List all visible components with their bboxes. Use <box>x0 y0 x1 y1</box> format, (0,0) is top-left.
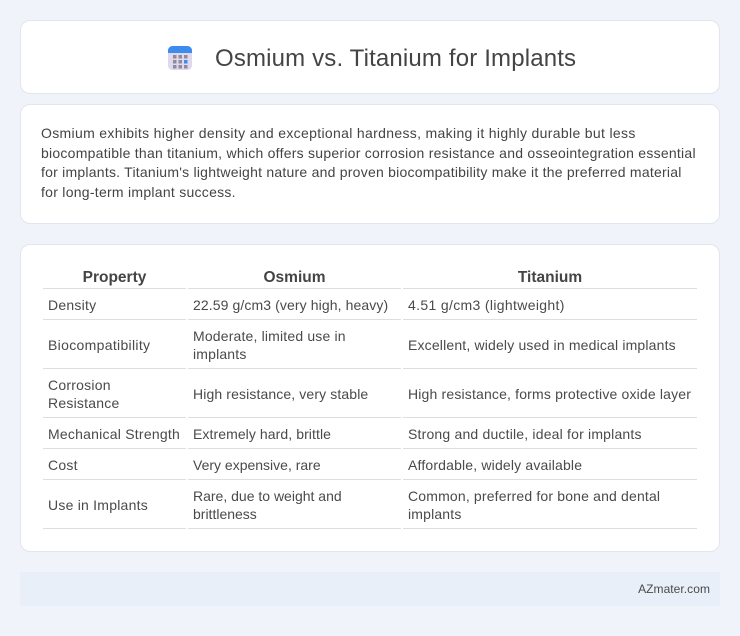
row: mechanical strength: Mechanical Strength <box>48 426 180 442</box>
summary text: Osmium exhibits higher density and exceptional hardness, making it highly durable but less <box>41 125 636 141</box>
row: density: Density <box>48 297 96 313</box>
panel: summary <box>20 104 720 224</box>
row: biocompatibility: Biocompatibility <box>48 337 150 353</box>
row: density <box>48 297 565 313</box>
summary text: for long-term implant success. <box>41 184 236 200</box>
row: cost <box>48 457 582 473</box>
row: cost: Cost <box>48 457 78 473</box>
table <box>43 269 697 529</box>
row: corrosion resistance: Resistance <box>48 395 120 411</box>
row: cost: Very expensive, rare <box>193 457 321 473</box>
summary text <box>41 125 696 200</box>
header row <box>83 269 582 286</box>
row: corrosion resistance: Corrosion <box>48 377 111 393</box>
row: biocompatibility: implants <box>193 346 246 362</box>
row: biocompatibility: Excellent, widely used in medical implants <box>408 337 676 353</box>
footer <box>20 572 720 606</box>
title: Osmium vs. Titanium for Implants <box>215 45 576 72</box>
row: use in implants: Rare, due to weight and <box>193 488 342 504</box>
row: mechanical strength: Strong and ductile, ideal for implants <box>408 426 642 442</box>
row: density: 22.59 g/cm3 (very high, heavy) <box>193 297 388 313</box>
row: corrosion resistance: High resistance, very stable <box>193 386 368 402</box>
panel: title card <box>20 20 720 94</box>
summary text: for implants. Titanium's lightweight nature and proven biocompatibility make it the preferred material <box>41 164 682 180</box>
row: use in implants: Use in Implants <box>48 497 148 513</box>
row: corrosion resistance: High resistance, forms protective oxide layer <box>408 386 691 402</box>
row: use in implants: Common, preferred for bone and dental <box>408 488 660 504</box>
header row: Titanium <box>518 269 582 286</box>
header row: Osmium <box>263 269 326 286</box>
row: mechanical strength: Extremely hard, brittle <box>193 426 331 442</box>
row: biocompatibility <box>48 328 676 362</box>
row: density: 4.51 g/cm3 (lightweight) <box>408 297 565 313</box>
row: biocompatibility: Moderate, limited use in <box>193 328 346 344</box>
row: use in implants: brittleness <box>193 506 257 522</box>
row: use in implants <box>48 488 660 522</box>
panel: comparison table <box>20 244 720 552</box>
icon: calendar <box>168 46 192 70</box>
row: use in implants: implants <box>408 506 462 522</box>
header row: Property <box>83 269 146 286</box>
summary text: biocompatible than titanium, which offers superior corrosion resistance and osseointegration essential <box>41 144 696 160</box>
row: mechanical strength <box>48 426 642 442</box>
row: cost: Affordable, widely available <box>408 457 582 473</box>
footer credit: AZmater.com <box>638 582 710 596</box>
row: corrosion resistance <box>48 377 691 411</box>
